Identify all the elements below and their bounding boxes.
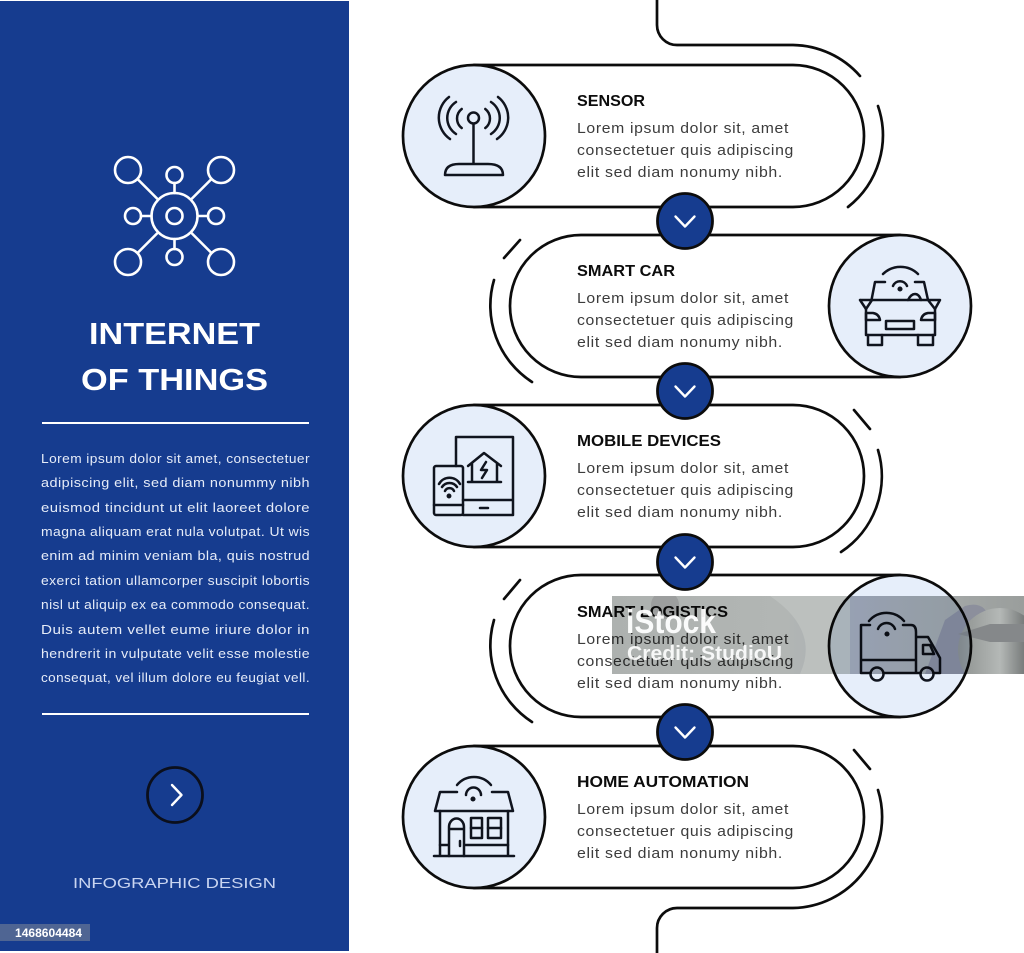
stock id tag (0, 924, 90, 941)
icon: connector chevron 1 (658, 194, 712, 248)
heading: SENSOR (577, 93, 645, 110)
text block: consectetuer quis adipiscing (577, 824, 794, 840)
title: INTERNET (89, 316, 260, 351)
text block: sidebar paragraph: adipiscing elit, sed diam nonummy nibh (41, 475, 310, 490)
heading: MOBILE DEVICES (577, 433, 721, 450)
text block: sidebar paragraph: exerci tation ullamcorper suscipit lobortis (41, 573, 310, 588)
text block: elit sed diam nonumy nibh. (577, 335, 783, 351)
text block: elit sed diam nonumy nibh. (577, 676, 783, 692)
stock id tag: 1468604484 (15, 928, 83, 940)
text block (577, 461, 794, 521)
text block: sidebar paragraph: magna aliquam erat nula volutpat. Ut wis (41, 524, 310, 539)
watermark text: iStock: iStock (626, 603, 717, 640)
panel: mobile devices (403, 405, 882, 552)
text block: sidebar paragraph: euismod tincidunt ut elit laoreet dolore (41, 500, 310, 515)
text block (577, 632, 794, 692)
watermark text: credit: Credit: StudioU (627, 642, 782, 665)
heading: HOME AUTOMATION (577, 774, 749, 791)
panel: home automation (403, 746, 870, 888)
text block: Lorem ipsum dolor sit, amet (577, 802, 789, 818)
text block: Lorem ipsum dolor sit, amet (577, 291, 789, 307)
watermark: credit band (612, 596, 1024, 674)
text block: sidebar paragraph: consequat, vel illum dolore eu feugiat vell. (41, 670, 310, 685)
icon: smart car (860, 267, 940, 345)
title: OF THINGS (81, 362, 268, 397)
heading: SMART LOGISTICS (577, 604, 728, 621)
panel: smart car (490, 235, 971, 382)
text block (577, 121, 794, 181)
panel: sensor (403, 65, 883, 207)
text block: elit sed diam nonumy nibh. (577, 505, 783, 521)
title (81, 316, 268, 397)
line: top connector (657, 0, 860, 76)
text block: Lorem ipsum dolor sit, amet (577, 632, 789, 648)
icon: sensor antenna (439, 97, 508, 175)
text block: elit sed diam nonumy nibh. (577, 846, 783, 862)
panel: smart logistics (490, 575, 971, 722)
text block: consectetuer quis adipiscing (577, 654, 794, 670)
text block: sidebar paragraph: Lorem ipsum dolor sit amet, consectetuer (41, 451, 310, 466)
icon: connector chevron 4 (658, 704, 712, 760)
text block (577, 291, 794, 351)
text block: consectetuer quis adipiscing (577, 483, 794, 499)
text block: Lorem ipsum dolor sit, amet (577, 121, 789, 137)
icon: next arrow button (148, 768, 202, 822)
line: bottom connector (657, 790, 882, 953)
caption: infographic design: INFOGRAPHIC DESIGN (73, 875, 276, 892)
icon: delivery truck (861, 613, 940, 680)
icon: smart home (434, 777, 514, 856)
heading: SMART CAR (577, 263, 675, 280)
text block: sidebar paragraph: nisl ut aliquip ex ea commodo consequat. (41, 597, 310, 612)
text block: consectetuer quis adipiscing (577, 143, 794, 159)
icon: connector chevron 2 (658, 364, 712, 418)
text block: sidebar paragraph (41, 451, 310, 685)
icon: network hub (115, 157, 234, 275)
text block (577, 802, 794, 862)
text block: Lorem ipsum dolor sit, amet (577, 461, 789, 477)
icon: connector chevron 3 (658, 534, 712, 590)
icon: phone and tablet (434, 437, 513, 515)
panel: left blue sidebar (0, 1, 349, 951)
text block: elit sed diam nonumy nibh. (577, 165, 783, 181)
text block: sidebar paragraph: enim ad minim veniam bla, quis nostrud (41, 548, 310, 563)
text block: consectetuer quis adipiscing (577, 313, 794, 329)
text block: sidebar paragraph: Duis autem vellet eume iriure dolor in (41, 622, 310, 637)
text block: sidebar paragraph: hendrerit in vulputate velit esse molestie (41, 646, 310, 661)
